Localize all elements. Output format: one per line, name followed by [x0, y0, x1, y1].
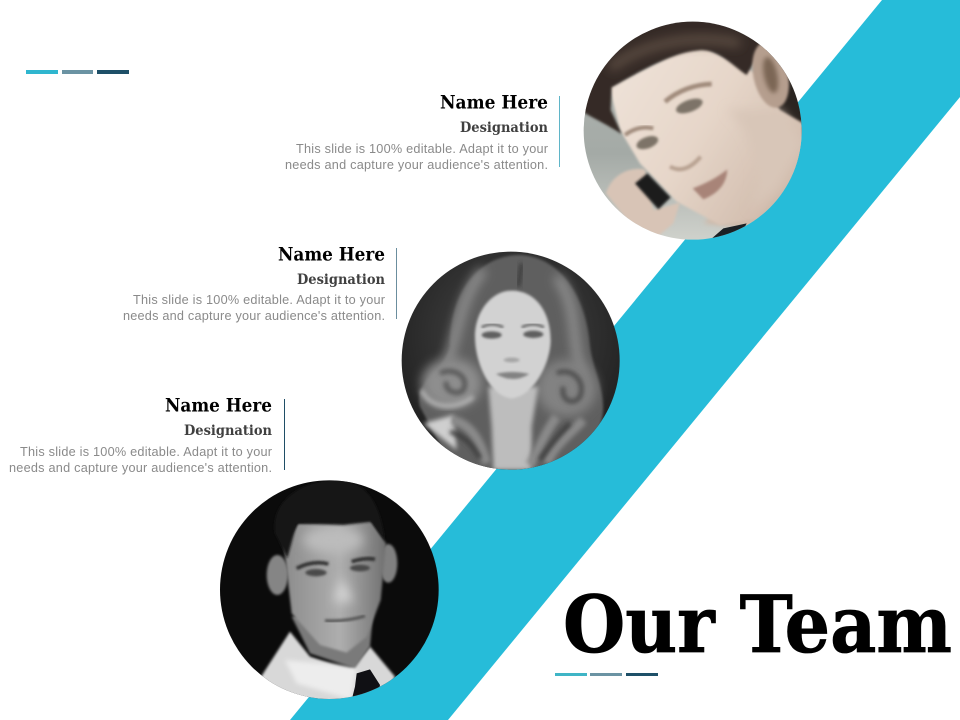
top accent bars	[26, 70, 129, 74]
left curl	[422, 358, 482, 408]
photo: man in shirt and tie	[220, 480, 439, 699]
team member 1 text: Designation	[460, 120, 548, 136]
team member 2 text: Name Here	[278, 244, 385, 266]
team member 3 divider	[284, 399, 285, 470]
lower curls	[452, 417, 583, 465]
team member 1 text: needs and capture your audience's attention.	[285, 158, 548, 172]
neck and jaw	[706, 129, 802, 229]
team member 3 text: This slide is 100% editable. Adapt it to your	[20, 445, 273, 459]
brows	[665, 84, 712, 102]
team member 1 divider	[559, 96, 560, 167]
team member 1 text	[285, 92, 549, 172]
face	[284, 520, 386, 653]
mouth	[325, 616, 365, 621]
phone	[635, 173, 671, 209]
neck and chest	[488, 387, 538, 470]
team member 2 text: Designation	[297, 272, 385, 288]
team member 2 text: This slide is 100% editable. Adapt it to your	[133, 293, 386, 307]
nose shadow	[670, 157, 701, 169]
team member 3 text: Name Here	[165, 394, 272, 416]
eyes	[674, 97, 704, 115]
brows	[297, 559, 375, 568]
cheek shading	[778, 105, 802, 152]
ears	[267, 555, 288, 595]
team member 3 text: Designation	[184, 423, 272, 439]
ear	[750, 44, 791, 109]
bottom accent bars	[555, 673, 658, 676]
team member 1 text: Name Here	[440, 92, 548, 114]
neck	[292, 610, 373, 668]
team member 3 text	[9, 394, 273, 475]
nose	[504, 358, 520, 362]
team member 2 text	[123, 244, 386, 323]
tie	[352, 669, 380, 696]
right curl	[537, 360, 597, 417]
photo: man on phone	[584, 22, 802, 240]
face	[475, 291, 551, 398]
diagonal cyan band	[290, 0, 960, 720]
hair	[585, 22, 763, 135]
team member 3 text: needs and capture your audience's attention.	[9, 461, 272, 475]
photo: woman	[402, 252, 620, 470]
face	[609, 43, 803, 225]
hair highlights	[447, 270, 583, 377]
team member 2 text: needs and capture your audience's attention.	[123, 309, 385, 323]
mouth	[496, 372, 529, 379]
hair mass	[419, 255, 603, 470]
nose highlight	[333, 577, 353, 602]
eyes	[482, 331, 502, 339]
team member 1 text: This slide is 100% editable. Adapt it to your	[296, 142, 549, 156]
team member 2 divider	[396, 248, 397, 319]
collar	[712, 223, 747, 238]
shirt	[260, 632, 395, 707]
eyes	[305, 569, 327, 576]
hair	[274, 480, 385, 558]
hand	[606, 169, 680, 237]
mouth	[693, 169, 727, 199]
parting	[518, 263, 522, 287]
